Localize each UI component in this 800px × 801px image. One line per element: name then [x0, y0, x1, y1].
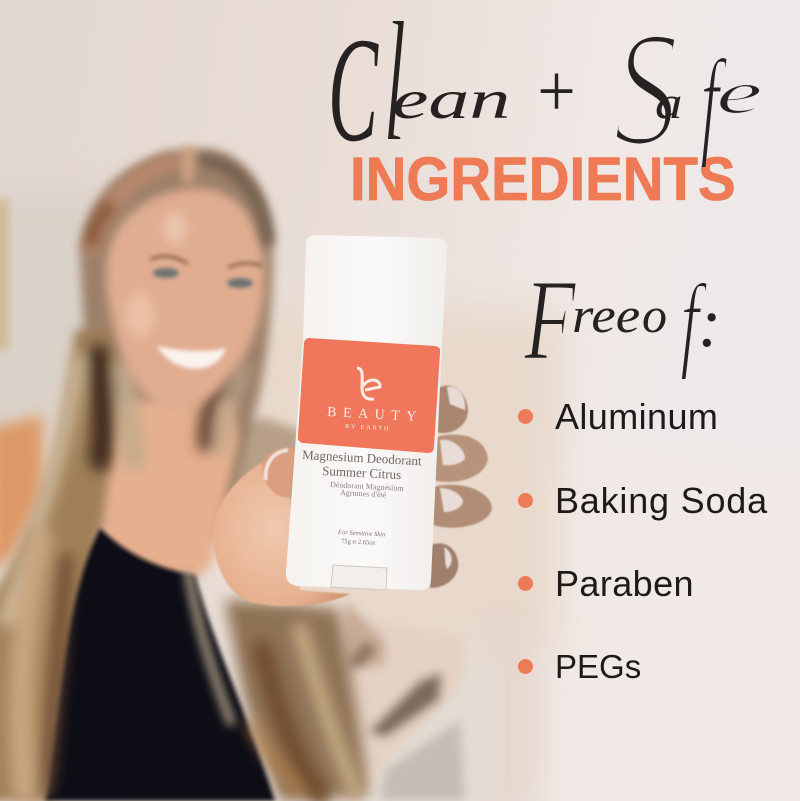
product name: Magnesium Deodorant — [302, 447, 422, 468]
hand: palm, thumb and fingers — [213, 386, 492, 606]
logo — [357, 368, 380, 399]
bullet: Aluminum: Aluminum — [555, 396, 718, 437]
title: Clean + Safe: a — [655, 78, 683, 128]
title: Clean + Safe: S — [612, 0, 680, 179]
hair strands — [5, 355, 355, 795]
subheading: Free of: f — [680, 264, 708, 381]
product body — [286, 340, 442, 590]
title: Clean + Safe: f — [700, 36, 728, 169]
hair back — [0, 149, 273, 801]
black top — [45, 528, 275, 801]
product: deodorant stick: BY EARTH — [345, 424, 390, 432]
small print: For Sensitive Skin — [337, 529, 385, 538]
bullet: PEGs — [518, 648, 641, 685]
product base notch — [331, 565, 387, 590]
product cap — [303, 235, 447, 345]
right hair mass — [225, 600, 368, 801]
brand text: BEAUTY — [327, 405, 423, 425]
product: deodorant stick: Summer Citrus — [322, 463, 402, 482]
right shoulder — [225, 418, 300, 540]
subheading: Free of: o — [642, 287, 667, 343]
title: Clean + Safe: ean — [392, 70, 510, 131]
chest and neck — [100, 400, 238, 582]
product: deodorant stick: 75g ℮ 2.65oz — [341, 538, 376, 547]
furniture bottom — [325, 600, 500, 801]
heading: INGREDIENTS: INGREDIENTS — [350, 145, 736, 213]
product: deodorant stick: Agrumes d'été — [340, 488, 387, 499]
title: Clean + Safe: C — [328, 6, 379, 173]
face — [106, 188, 264, 412]
product label — [298, 338, 440, 453]
bullet: Paraben: Paraben — [555, 563, 694, 604]
french name: Déodorant Magnésium — [330, 480, 405, 493]
bullet: Baking Soda: Baking Soda — [555, 480, 768, 521]
braid and hair top — [92, 152, 268, 245]
subheading: Free of: : — [698, 285, 721, 362]
title: Clean + Safe: e — [716, 60, 763, 126]
subheading: Free of: ree — [572, 288, 640, 343]
bullet: PEGs: PEGs — [555, 648, 641, 685]
subheading: Free of: F — [523, 256, 577, 383]
eyes and smile — [150, 256, 262, 369]
title: Clean + Safe: + — [533, 50, 579, 133]
orange background left — [0, 415, 45, 570]
